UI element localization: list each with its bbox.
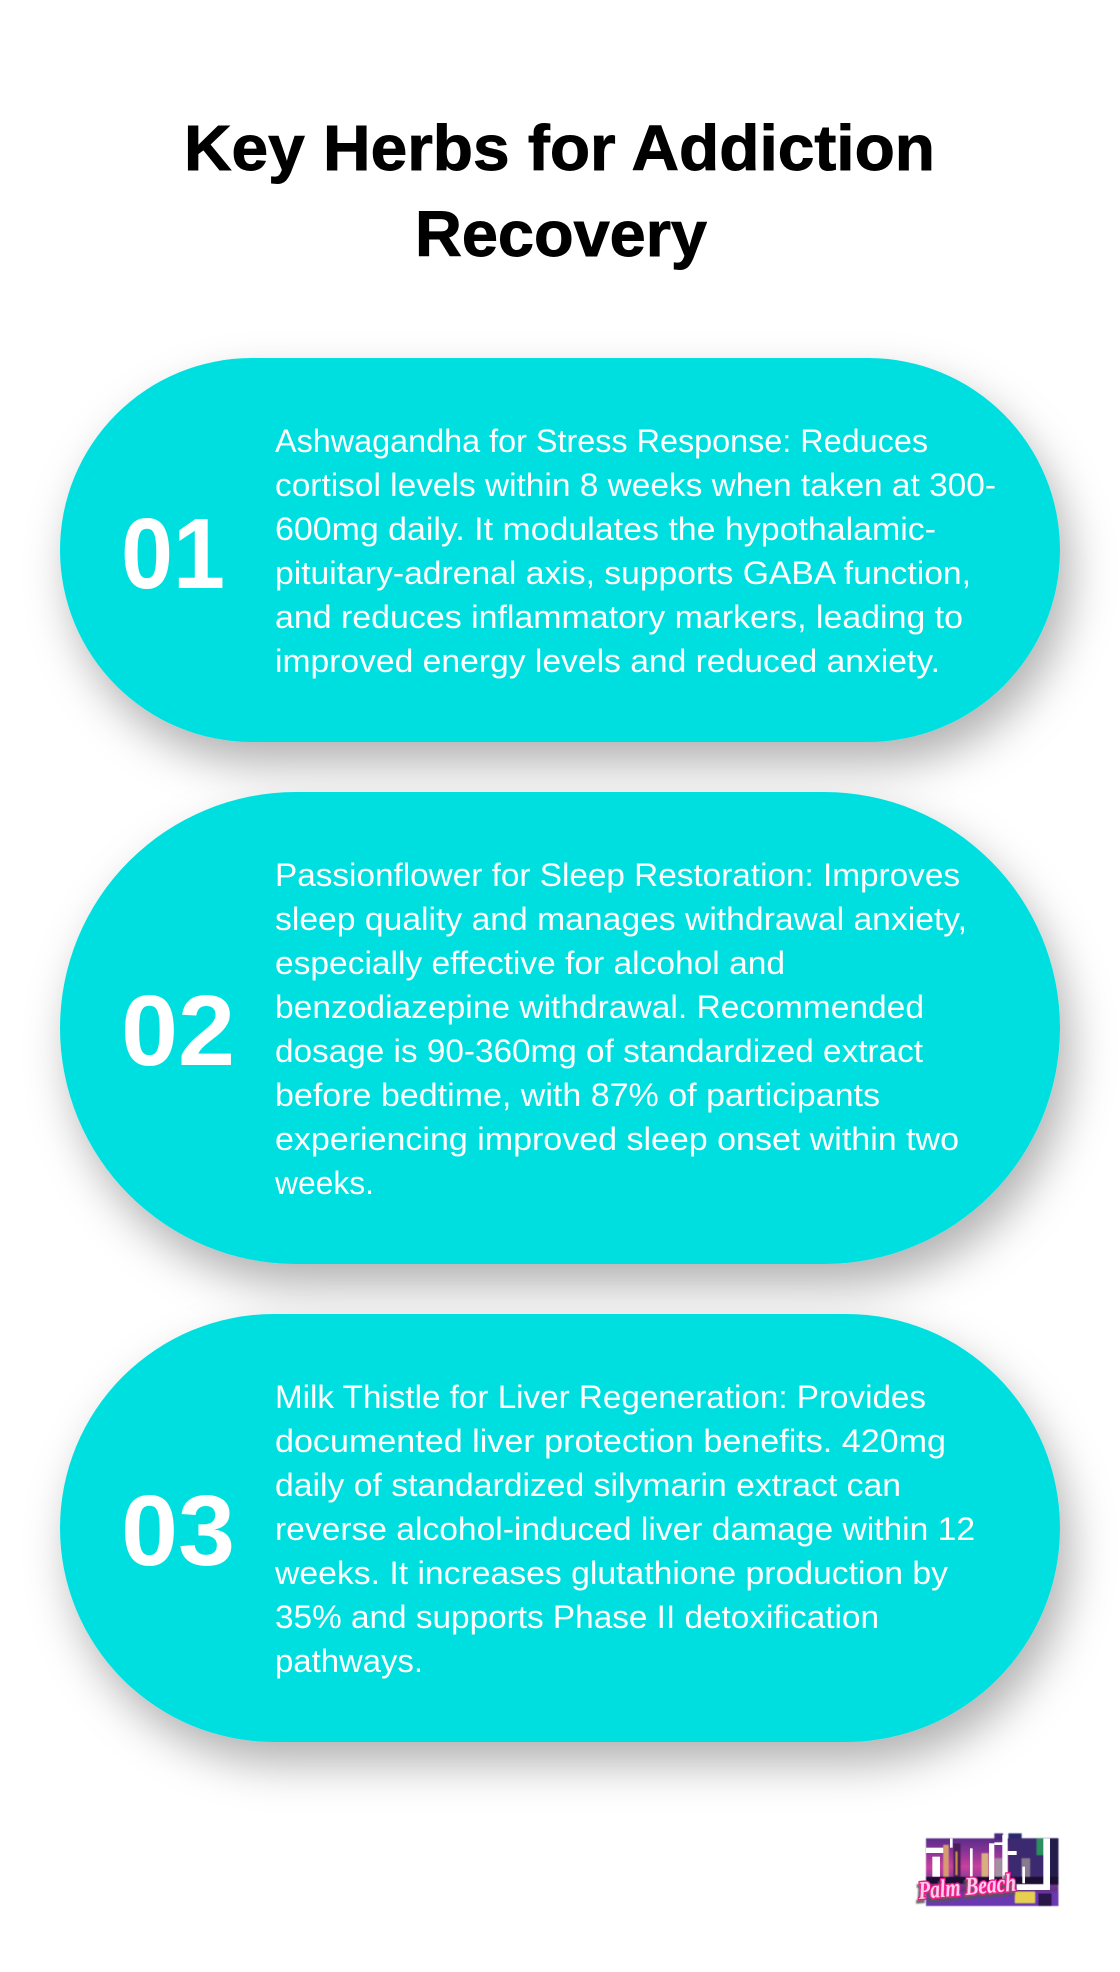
body text: Milk Thistle for Liver Regeneration: Provides [275,1379,926,1415]
body text: weeks. It increases glutathione production by [274,1555,948,1591]
panel: ashwagandha [60,358,1060,742]
body text: benzodiazepine withdrawal. Recommended [275,989,924,1025]
logo amity letter cut-outs [926,1835,1050,1890]
body text: experiencing improved sleep onset within two [275,1121,959,1157]
number 02: 02 [121,975,235,1087]
body text: dosage is 90-360mg of standardized extract [275,1033,923,1069]
body text: Ashwagandha for Stress Response: Reduces [275,423,928,459]
title: Recovery [415,198,707,270]
body text [274,1379,975,1679]
pill background [60,1314,1060,1742]
body text: pathways. [275,1643,423,1679]
title: Key Herbs for Addiction [184,112,935,184]
body text: especially effective for alcohol and [275,945,785,981]
panel: milk thistle [60,1314,1060,1742]
body text [275,423,996,679]
body text: daily of standardized silymarin extract can [275,1467,901,1503]
title [184,112,935,270]
body text: and reduces inflammatory markers, leading to [275,599,963,635]
body text [274,857,967,1201]
logo: amity palm beach [916,1833,1058,1906]
body text: 35% and supports Phase II detoxification [275,1599,879,1635]
pill background [60,792,1060,1264]
body text: sleep quality and manages withdrawal anxiety, [275,901,967,937]
panel: passionflower [60,792,1060,1264]
body text: documented liver protection benefits. 420mg [275,1423,946,1459]
logo city image [926,1833,1058,1906]
body text: weeks. [274,1165,374,1201]
body text: 600mg daily. It modulates the hypothalamic- [275,511,936,547]
number 01: 01 [121,498,225,610]
pill background [60,358,1060,742]
body text: cortisol levels within 8 weeks when taken at 300- [275,467,996,503]
number 03: 03 [121,1475,235,1587]
body text: pituitary-adrenal axis, supports GABA function, [275,555,971,591]
body text: reverse alcohol-induced liver damage within 12 [275,1511,975,1547]
body text: before bedtime, with 87% of participants [275,1077,880,1113]
body text: Passionflower for Sleep Restoration: Improves [275,857,960,893]
logo script text: Palm Beach [916,1870,1017,1905]
body text: improved energy levels and reduced anxiety. [275,643,940,679]
